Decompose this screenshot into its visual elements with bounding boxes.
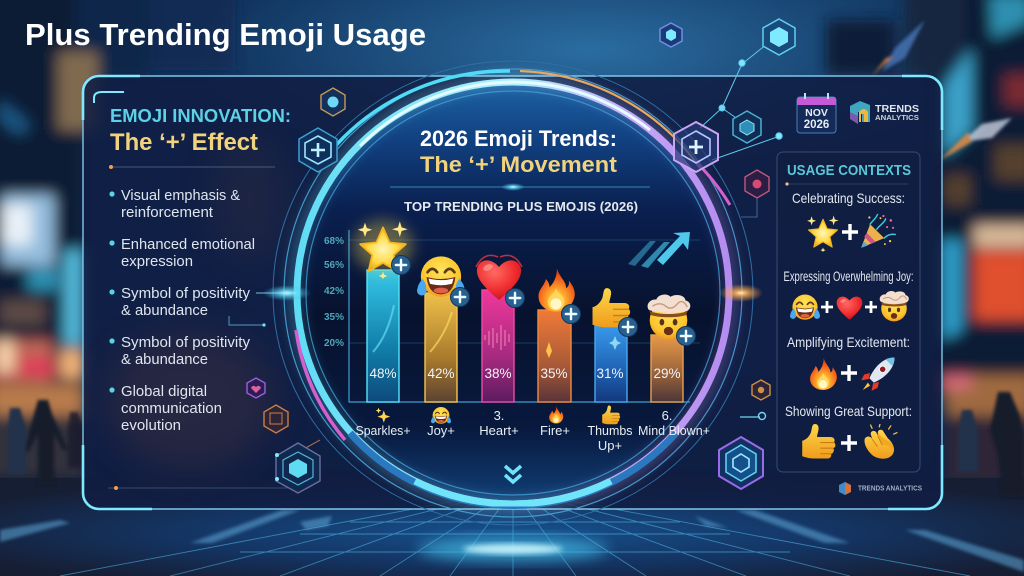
hexagon icon: calendar <box>264 405 288 433</box>
context: great support <box>785 403 912 459</box>
emoji: heart on bar <box>476 255 524 308</box>
y axis labels <box>324 236 344 349</box>
hexagon icon: plus left <box>299 128 337 172</box>
icon: calendar badge: NOV <box>805 107 828 119</box>
usage heading: USAGE CONTEXTS <box>787 162 911 179</box>
trend arrows <box>628 232 690 268</box>
chart title: TOP TRENDING PLUS EMOJIS (2026) <box>404 200 638 214</box>
panel: centre chart titles <box>390 126 650 214</box>
icon: calendar badge <box>797 93 836 133</box>
context: celebrating success: Celebrating Success: <box>792 190 905 206</box>
emoji: star on bar <box>353 220 413 279</box>
bar chart <box>324 220 710 453</box>
bullet list: Global digital <box>121 383 207 400</box>
footer logo: TRENDS ANALYTICS <box>858 484 922 492</box>
bullet list: & abundance <box>121 351 208 368</box>
hexagon icon: top right cyan <box>763 19 795 55</box>
bullet list: evolution <box>121 417 181 434</box>
logo: trends analytics: ANALYTICS <box>875 113 919 122</box>
floating rockets <box>872 20 1012 160</box>
logo: trends analytics <box>850 101 919 124</box>
bar: Thumbs Up: 31% <box>596 366 624 381</box>
bullet list: reinforcement <box>121 204 214 221</box>
bullet list: communication <box>121 400 222 417</box>
bar: Heart: 38% <box>484 366 512 381</box>
bar: Joy <box>425 293 457 402</box>
context: overwhelming joy: Expressing Overwhelming Joy: <box>784 269 914 284</box>
hexagon icon: bottom left cyan <box>275 443 320 493</box>
bar: Fire: 35% <box>540 366 568 381</box>
bar: Heart <box>482 290 514 402</box>
left subheading: The ‘+’ Effect <box>110 129 258 156</box>
category labels: Mind Blown+ <box>638 423 710 438</box>
category labels: Heart+ <box>479 423 519 438</box>
centre subheading: The ‘+’ Movement <box>420 152 618 177</box>
main glass panel <box>83 76 942 509</box>
context: amplifying excitement: Amplifying Excitement: <box>787 334 910 350</box>
hexagon icon: purple heart <box>247 378 265 398</box>
title: Plus Trending Emoji Usage <box>25 17 426 52</box>
category labels: Sparkles+ <box>356 423 410 438</box>
bar: Thumbs Up <box>595 323 627 402</box>
y axis labels: 68% <box>324 236 344 247</box>
hexagon icon: top left orange <box>321 88 345 116</box>
footer logo <box>839 482 922 495</box>
hexagon icon: bottom right layers <box>719 437 763 489</box>
category labels: Joy+ <box>427 423 455 438</box>
emoji: joy on bar <box>417 256 470 306</box>
bullet list: Symbol of positivity <box>121 285 250 302</box>
context: celebrating success <box>792 190 905 252</box>
bullet list <box>109 187 255 434</box>
bar: Sparkles: 48% <box>369 366 397 381</box>
bullet list: Symbol of positivity <box>121 334 250 351</box>
panel: usage contexts <box>777 152 920 472</box>
context: great support: Showing Great Support: <box>785 403 912 419</box>
emoji: mind blown on bar <box>648 295 696 346</box>
bar: Mind Blown <box>651 335 683 402</box>
context: amplifying excitement <box>787 334 910 391</box>
y axis labels: 42% <box>324 286 344 297</box>
category labels: 6. <box>662 408 672 423</box>
connector lines and nodes <box>302 40 782 450</box>
bullet list: expression <box>121 253 193 270</box>
panel: left innovation text <box>109 106 291 434</box>
icon: calendar badge: 2026 <box>804 119 829 131</box>
category labels: Thumbs <box>588 423 633 438</box>
people silhouettes <box>8 392 1024 496</box>
left heading: EMOJI INNOVATION: <box>110 106 291 126</box>
central holographic ring <box>229 61 766 525</box>
y axis labels: 20% <box>324 338 344 349</box>
y axis labels: 35% <box>324 312 344 323</box>
bullet list: & abundance <box>121 302 208 319</box>
bar: Fire <box>538 310 571 402</box>
bullet list: Enhanced emotional <box>121 236 255 253</box>
category labels: Fire+ <box>540 423 570 438</box>
bar: Sparkles <box>367 270 399 402</box>
hexagon icon: small hand <box>752 380 770 400</box>
hexagon icon: pink right <box>745 170 769 198</box>
hexagon icon: top centre <box>660 23 682 47</box>
bar: Mind Blown: 29% <box>653 366 681 381</box>
category labels: 3. <box>494 408 504 423</box>
category labels: Up+ <box>598 438 622 453</box>
floor <box>0 478 1024 576</box>
bullet list: Visual emphasis & <box>121 187 240 204</box>
y axis labels: 56% <box>324 260 344 271</box>
bar: Joy: 42% <box>427 366 455 381</box>
category labels <box>356 406 710 453</box>
hexagon icon: plus right <box>674 122 718 172</box>
logo: trends analytics: TRENDS <box>875 104 919 115</box>
icon: down chevrons <box>505 466 521 482</box>
emoji: thumb on bar <box>593 288 638 336</box>
context: overwhelming joy <box>784 269 914 321</box>
centre heading: 2026 Emoji Trends: <box>420 126 617 151</box>
emoji: fire on bar <box>539 268 580 324</box>
hexagon icon: network <box>733 111 761 143</box>
